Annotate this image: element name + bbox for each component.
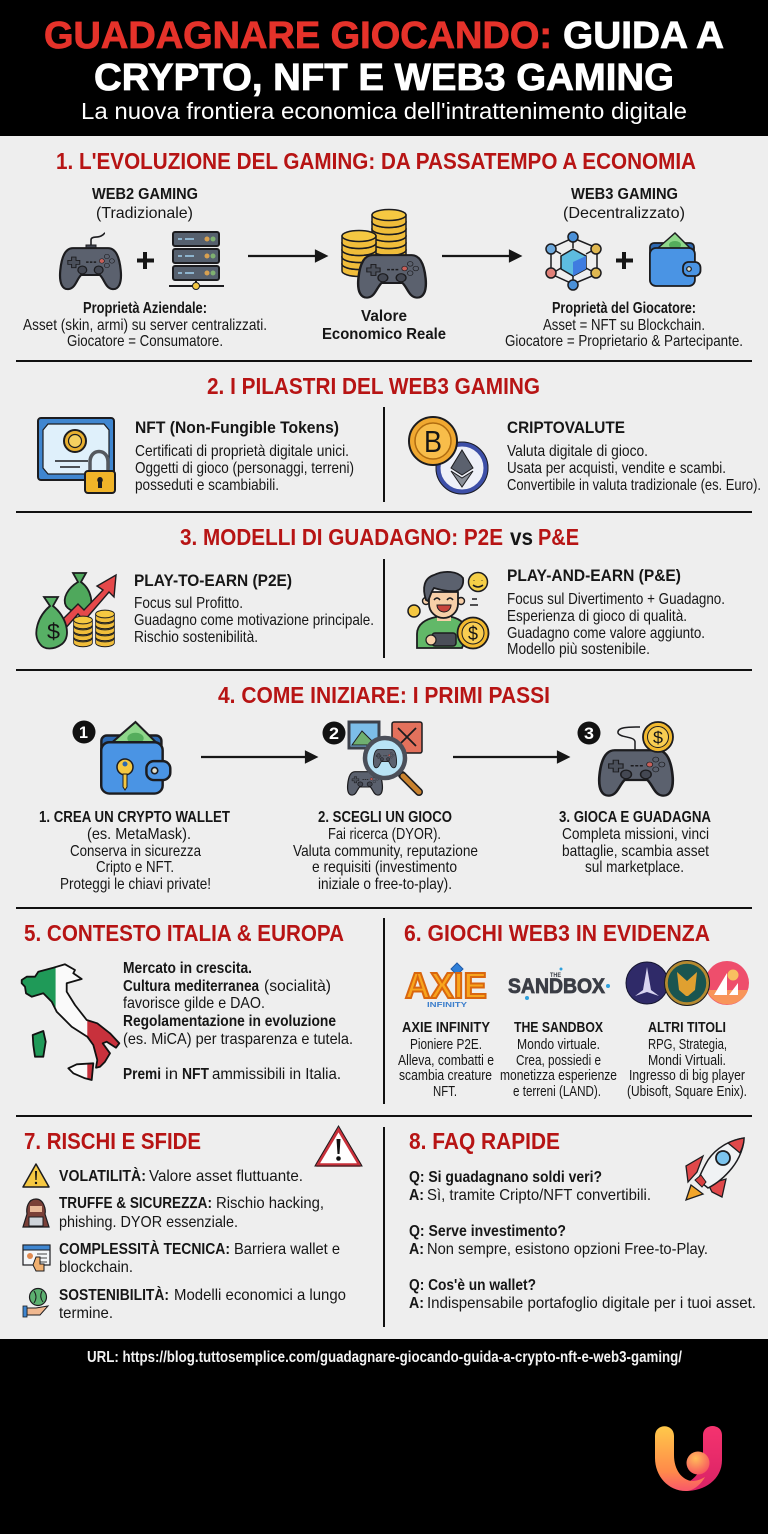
icon: controller with coin: $ <box>653 728 664 747</box>
logo: The Sandbox: SANDBOX <box>508 975 605 998</box>
icon: wallet <box>650 233 700 286</box>
text: step 1 <box>39 809 230 893</box>
text: Axie Infinity: scambia creature <box>399 1067 492 1084</box>
heading: section 2: 2. I PILASTRI DEL WEB3 GAMING <box>207 373 540 399</box>
text: technical complexity: Barriera wallet e <box>234 1241 340 1258</box>
icon: blockchain network <box>546 232 601 290</box>
text: step 1: Cripto e NFT. <box>96 859 174 876</box>
text: FAQ 1 <box>409 1169 651 1204</box>
heading: section 7: 7. RISCHI E SFIDE <box>24 1128 201 1154</box>
icon: browser with hand <box>23 1245 50 1271</box>
badge: number 2: 2 <box>329 724 339 743</box>
text: technical complexity: COMPLESSITÀ TECNICA: <box>59 1239 230 1258</box>
logo: Axie Infinity: INFINITY <box>427 1000 467 1009</box>
text: real economic value <box>322 308 446 343</box>
icon: happy gamer with coin <box>408 572 488 648</box>
heading: section 6: 6. GIOCHI WEB3 IN EVIDENZA <box>404 920 710 946</box>
text: Italian context: Premi <box>123 1066 161 1083</box>
text: player ownership <box>505 300 743 350</box>
text: Web2 gaming label: WEB2 GAMING <box>92 186 198 203</box>
logo: Axie Infinity: AXIE <box>405 965 487 1006</box>
panel: section 3 earning models <box>36 524 725 658</box>
icon: rocket <box>686 1138 744 1200</box>
text: Italian context: in <box>165 1066 178 1083</box>
text: step 3: 3. GIOCA E GUADAGNA <box>559 809 711 826</box>
text: step 2: Fai ricerca (DYOR). <box>328 826 441 843</box>
panel: section 5 Italy and Europe <box>15 920 353 1085</box>
text: Italian context: Cultura mediterranea <box>123 978 259 995</box>
text: play-to-earn <box>134 571 374 646</box>
text: step 2 <box>293 809 478 893</box>
text: other titles: ALTRI TITOLI <box>648 1019 726 1036</box>
icon: bitcoin and ethereum coins <box>409 417 488 494</box>
logo: The Sandbox: THE <box>550 973 561 979</box>
icon: plus <box>137 252 154 269</box>
badge: number 2 <box>322 722 346 744</box>
risk: sustainability <box>23 1285 346 1322</box>
text: company ownership: Giocatore = Consumatore. <box>67 333 223 350</box>
text: crypto pillar: Usata per acquisti, vendite e scambi. <box>507 460 726 477</box>
text: play-and-earn: Esperienza di gioco di qualità. <box>507 608 687 625</box>
text: Web3 gaming label <box>563 186 685 222</box>
text: technical complexity: blockchain. <box>59 1259 133 1276</box>
text: real economic value: Valore <box>361 308 407 325</box>
text: other titles: Mondi Virtuali. <box>648 1052 726 1069</box>
title block: GUADAGNARE GIOCANDO: <box>44 15 552 57</box>
text: Italian context <box>123 960 353 1083</box>
heading: section 4: 4. COME INIZIARE: I PRIMI PASSI <box>218 682 550 708</box>
text: play-and-earn: Guadagno come valore aggiunto. <box>507 625 705 642</box>
text: crypto pillar: CRIPTOVALUTE <box>507 418 625 437</box>
text: volatility <box>59 1166 303 1185</box>
title block: CRYPTO, NFT E WEB3 GAMING <box>94 57 674 99</box>
text: Axie Infinity: Alleva, combatti e <box>398 1052 494 1069</box>
icon: server stack <box>169 232 224 290</box>
badge: number 1 <box>72 720 96 744</box>
step 1: wallet <box>39 720 230 893</box>
text: step 3: Completa missioni, vinci <box>562 826 709 843</box>
title block <box>44 15 724 124</box>
footer <box>87 1349 722 1491</box>
icon: small warning <box>23 1164 49 1187</box>
text: Italian context: Regolamentazione in evoluzione <box>123 1013 336 1030</box>
text: Italian context: NFT <box>182 1066 209 1083</box>
risk: technical complexity <box>23 1239 340 1276</box>
text: player ownership: Asset = NFT su Blockchain. <box>543 317 705 334</box>
text: Italian context: ammissibili in Italia. <box>212 1066 341 1083</box>
text: scams and security: phishing. DYOR essenziale. <box>59 1214 238 1231</box>
text: FAQ 3: Q: Cos'è un wallet? <box>409 1277 536 1294</box>
text: FAQ 2: A: <box>409 1241 424 1258</box>
icon: NFT certificate with lock <box>38 418 115 493</box>
text: step 3: battaglie, scambia asset <box>562 843 709 860</box>
icon: hacker <box>23 1199 49 1227</box>
text: play-to-earn: Guadagno come motivazione principale. <box>134 612 374 629</box>
panel: section 1 evolution of gaming <box>23 148 743 350</box>
heading: section 1: 1. L'EVOLUZIONE DEL GAMING: DA PASSATEMPO A ECONOMIA <box>56 148 696 174</box>
text: play-to-earn: Focus sul Profitto. <box>134 595 243 612</box>
text: step 2: iniziale o free-to-play). <box>318 876 452 893</box>
text: company ownership <box>23 300 267 350</box>
icon: controller with coin <box>599 722 673 796</box>
text: Italian context: Mercato in crescita. <box>123 960 252 977</box>
text: step 1: 1. CREA UN CRYPTO WALLET <box>39 809 230 826</box>
text: The Sandbox <box>500 1019 617 1100</box>
text: Web3 gaming label: (Decentralizzato) <box>563 205 685 222</box>
text: Axie Infinity: Pioniere P2E. <box>410 1036 482 1053</box>
text: step 2: 2. SCEGLI UN GIOCO <box>318 809 452 826</box>
risk: volatility <box>23 1164 303 1187</box>
icon: magnifier over game art <box>348 722 422 795</box>
text: FAQ 2: Non sempre, esistono opzioni Free-to-Play. <box>427 1241 708 1258</box>
text: NFT pillar: Certificati di proprietà digitale unici. <box>135 443 349 460</box>
text: volatility: Valore asset fluttuante. <box>149 1168 303 1185</box>
heading: section 5: 5. CONTESTO ITALIA & EUROPA <box>24 920 344 946</box>
text: play-and-earn: Modello più sostenibile. <box>507 641 650 658</box>
text: step 1: Conserva in sicurezza <box>70 843 201 860</box>
text: NFT pillar: Oggetti di gioco (personaggi, terreni) <box>135 460 354 477</box>
logos: other games <box>626 960 749 1006</box>
icon: plus <box>616 252 633 269</box>
icon: money bags and growth arrow: $ <box>47 619 60 644</box>
text: other titles: RPG, Strategia, <box>648 1036 727 1053</box>
text: Web2 gaming label <box>92 186 198 222</box>
text: Axie Infinity: NFT. <box>433 1083 457 1100</box>
text: NFT pillar: NFT (Non-Fungible Tokens) <box>135 418 339 437</box>
text: other titles: Ingresso di big player <box>629 1067 745 1084</box>
badge: number 3 <box>578 722 600 744</box>
text: Italian context: favorisce gilde e DAO. <box>123 995 265 1012</box>
arrow: value to web3 <box>442 251 520 261</box>
icon: bitcoin and ethereum coins: B <box>424 424 442 459</box>
arrow: step 2 to 3 <box>453 752 568 762</box>
text: step 1: (es. MetaMask). <box>87 826 191 843</box>
heading: section 3: vs <box>510 524 533 550</box>
badge: number 3: 3 <box>584 724 594 743</box>
icon: globe in hand <box>23 1288 48 1317</box>
panel: section 7 risks <box>23 1126 362 1322</box>
panel: section 4 first steps <box>39 682 711 893</box>
text: Italian context: (es. MiCA) per trasparenza e tutela. <box>123 1031 353 1048</box>
step 3: play and earn <box>559 722 711 876</box>
text: crypto pillar: Valuta digitale di gioco. <box>507 443 648 460</box>
text: play-to-earn: PLAY-TO-EARN (P2E) <box>134 571 292 590</box>
text: Web2 gaming label: (Tradizionale) <box>96 205 193 222</box>
panel: section 8 FAQ <box>409 1128 756 1312</box>
text: NFT pillar: posseduti e scambiabili. <box>135 477 279 494</box>
text: volatility: VOLATILITÀ: <box>59 1166 146 1185</box>
text: sustainability: Modelli economici a lungo <box>174 1287 346 1304</box>
text: scams and security <box>59 1195 324 1231</box>
text: crypto pillar <box>507 418 761 494</box>
text: FAQ 1: Sì, tramite Cripto/NFT convertibili. <box>427 1187 651 1204</box>
text: play-and-earn: Focus sul Divertimento + Guadagno. <box>507 591 725 608</box>
icon: coins and controller <box>342 210 426 298</box>
text: sustainability: termine. <box>59 1305 113 1322</box>
icon: money bags and growth arrow <box>36 573 116 648</box>
text: FAQ 1: Q: Si guadagnano soldi veri? <box>409 1169 602 1186</box>
text: other titles <box>627 1019 747 1100</box>
text: step 3 <box>559 809 711 876</box>
arrow: web2 to value <box>248 251 326 261</box>
risk: scams and security <box>23 1195 324 1231</box>
text: company ownership: Proprietà Aziendale: <box>83 300 207 317</box>
text: The Sandbox: e terreni (LAND). <box>513 1083 601 1100</box>
text: Axie Infinity: AXIE INFINITY <box>402 1019 490 1036</box>
heading: section 8: 8. FAQ RAPIDE <box>409 1128 560 1154</box>
text: step 1: Proteggi le chiavi private! <box>60 876 211 893</box>
text: Web3 gaming label: WEB3 GAMING <box>571 186 678 203</box>
text: play-and-earn: PLAY-AND-EARN (P&E) <box>507 566 681 585</box>
text: technical complexity <box>59 1239 340 1276</box>
text: sustainability <box>59 1285 346 1322</box>
text: The Sandbox: THE SANDBOX <box>514 1019 603 1036</box>
text: The Sandbox: Mondo virtuale. <box>517 1036 600 1053</box>
text: FAQ 3 <box>409 1277 756 1312</box>
text: FAQ 2 <box>409 1223 708 1258</box>
heading: section 3: 3. MODELLI DI GUADAGNO: P2E <box>180 524 503 550</box>
text: step 2: e requisiti (investimento <box>312 859 457 876</box>
panel: section 6 Web3 games <box>398 920 749 1100</box>
text: The Sandbox: Crea, possiedi e <box>516 1052 601 1069</box>
text: FAQ 1: A: <box>409 1187 424 1204</box>
text: FAQ 2: Q: Serve investimento? <box>409 1223 566 1240</box>
icon: warning triangle <box>315 1126 362 1166</box>
title block: La nuova frontiera economica dell'intrattenimento digitale <box>81 98 687 124</box>
heading: section 3: P&E <box>538 524 579 550</box>
text: The Sandbox: monetizza esperienze <box>500 1067 617 1084</box>
icon: game controller <box>60 233 121 289</box>
arrow: step 1 to 2 <box>201 752 316 762</box>
logo: brand U <box>655 1426 722 1491</box>
text: scams and security: TRUFFE & SICUREZZA: <box>59 1195 212 1212</box>
text: play-to-earn: Rischio sostenibilità. <box>134 629 258 646</box>
text: NFT pillar <box>135 418 354 494</box>
text: real economic value: Economico Reale <box>322 326 446 343</box>
text: company ownership: Asset (skin, armi) su server centralizzati. <box>23 317 267 334</box>
text: FAQ 3: A: <box>409 1295 424 1312</box>
icon: wallet with key <box>101 722 170 794</box>
step 2: choose a game <box>293 722 478 893</box>
text: Axie Infinity <box>398 1019 494 1100</box>
text: scams and security: Rischio hacking, <box>216 1195 324 1212</box>
text: step 3: sul marketplace. <box>585 859 684 876</box>
icon: happy gamer with coin: $ <box>468 624 478 645</box>
text: sustainability: SOSTENIBILITÀ: <box>59 1285 169 1304</box>
title block: GUIDA A <box>563 15 724 57</box>
text: FAQ 3: Indispensabile portafoglio digitale per i tuoi asset. <box>427 1295 756 1312</box>
icon: map of Italy <box>20 963 120 1081</box>
text: player ownership: Proprietà del Giocatore: <box>552 300 696 317</box>
badge: number 1: 1 <box>79 723 88 742</box>
logo: The Sandbox <box>508 968 610 1000</box>
panel: section 2 pillars <box>38 373 761 502</box>
text: play-and-earn <box>507 566 725 658</box>
text: Italian context: (socialità) <box>264 978 331 995</box>
text: step 2: Valuta community, reputazione <box>293 843 478 860</box>
